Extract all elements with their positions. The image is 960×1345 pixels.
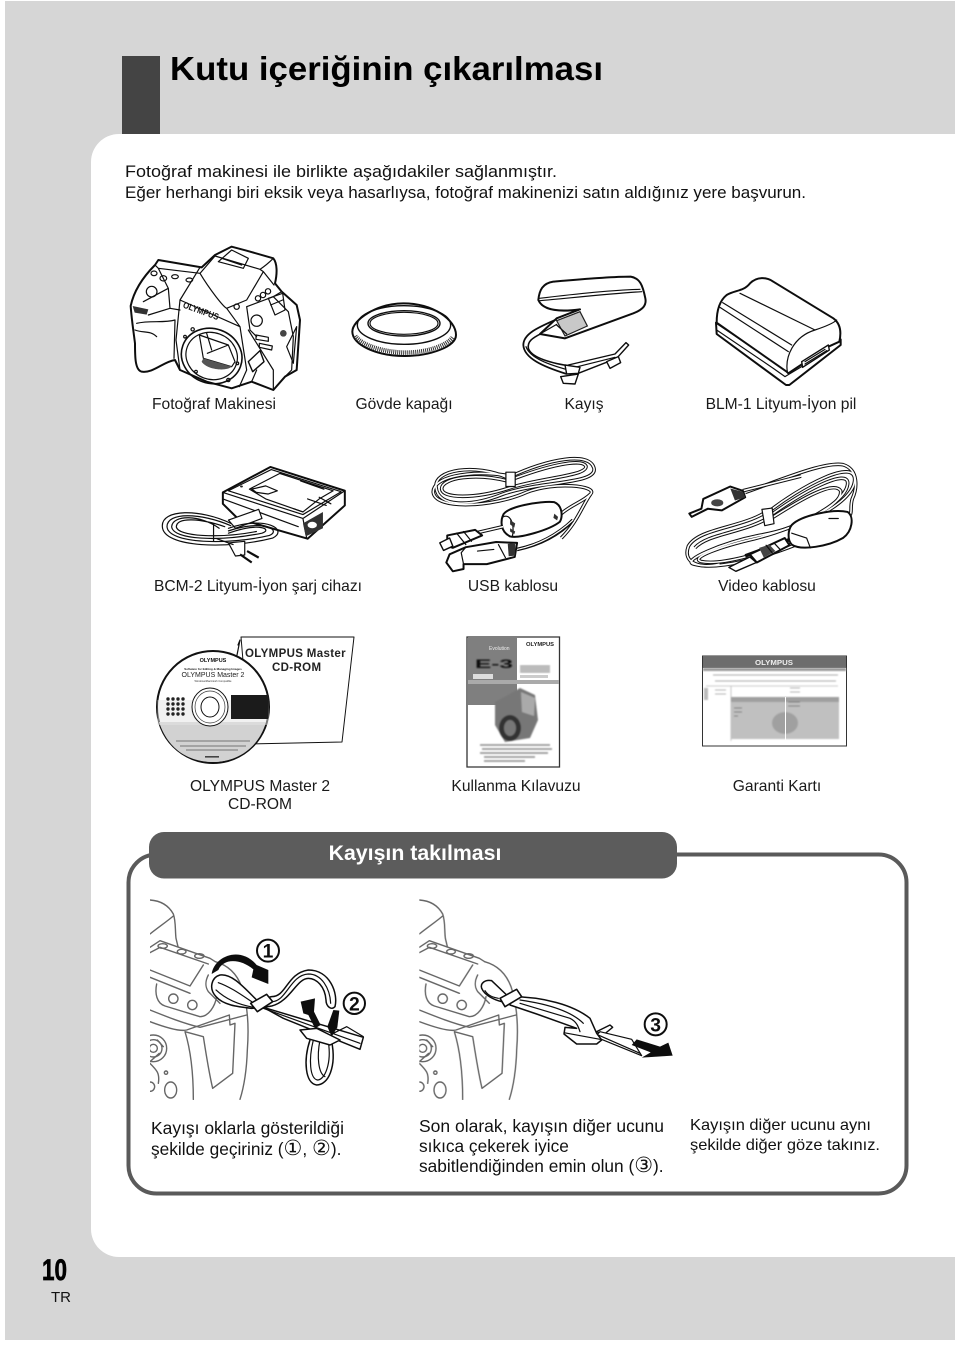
caption: OLYMPUS Master 2 CD-ROM: CD-ROM (228, 796, 292, 813)
arrow 3 (632, 1039, 673, 1058)
intro text (125, 163, 806, 202)
caption: Garanti Kartı: Garanti Kartı (733, 778, 821, 795)
circled number 2: 2 (349, 994, 360, 1015)
illustration: instruction manual: E-3 (475, 657, 514, 671)
caption: Kullanma Kılavuzu: Kullanma Kılavuzu (451, 778, 581, 795)
language code: TR (51, 1289, 71, 1306)
white content panel (91, 134, 960, 1257)
tail of strap (595, 1025, 642, 1056)
step 2 text (419, 1116, 664, 1177)
illustration: instruction manual: OLYMPUS (526, 642, 555, 648)
illustration: USB cable (433, 459, 594, 571)
caption: USB kablosu: USB kablosu (468, 578, 558, 595)
caption: OLYMPUS Master 2 CD-ROM (190, 778, 330, 813)
hanging strap loops (300, 1027, 363, 1085)
section heading: Kayışın takılması (149, 832, 677, 878)
illustration: video cable (687, 464, 856, 571)
step 1 text: şekilde geçiriniz (①, ②). (151, 1136, 341, 1160)
circled number 1: 1 (263, 942, 274, 963)
step 1 text: Kayışı oklarla gösterildiği (151, 1118, 344, 1138)
intro text: Eğer herhangi biri eksik veya hasarlıysa, fotoğraf makinenizi satın aldığınız yere başvurun. (125, 184, 806, 202)
circled number 3 (645, 1013, 667, 1036)
step 2 text: Son olarak, kayışın diğer ucunu (419, 1116, 664, 1136)
arrow 1 (212, 954, 268, 984)
disc: OLYMPUS Master 2 (182, 672, 245, 679)
tightened strap (481, 980, 602, 1044)
illustration: camera body: OLYMPUS (182, 300, 220, 322)
step 3 text (690, 1117, 880, 1154)
disc: OLYMPUS (200, 658, 227, 664)
intro text: Fotoğraf makinesi ile birlikte aşağıdakiler sağlanmıştır. (125, 163, 557, 181)
illustration: warranty card: OLYMPUS (755, 660, 793, 667)
step 2 text: sıkıca çekerek iyice (419, 1136, 569, 1156)
illustration: instruction manual (467, 637, 560, 767)
illustration: warranty card (702, 656, 846, 746)
sleeve (232, 637, 354, 744)
illustration: camera body (131, 247, 300, 392)
arrow 2 (301, 998, 339, 1037)
section frame: strap attachment (128, 854, 906, 1194)
sleeve: OLYMPUS Master (245, 648, 346, 660)
circled number 2 (344, 993, 365, 1015)
dark title marker (122, 56, 160, 134)
sleeve: CD-ROM (272, 662, 321, 674)
circled number 3: 3 (650, 1015, 661, 1036)
step 1 text (151, 1118, 344, 1160)
illustration: battery charger (162, 467, 345, 563)
page number: 10 (42, 1254, 67, 1287)
caption: Fotoğraf Makinesi: Fotoğraf Makinesi (152, 396, 276, 413)
strap end loop (212, 970, 363, 1049)
illustration: instruction manual: Evolution (489, 646, 510, 652)
title: Kutu içeriğinin çıkarılması (170, 51, 603, 88)
step 3 text: Kayışın diğer ucunu aynı (690, 1117, 871, 1134)
illustration: battery (716, 278, 841, 385)
illustration: step 2 tightening strap (409, 900, 673, 1099)
illustration: neck strap (523, 277, 646, 384)
disc: Software for Editing & Managing Images (184, 667, 242, 671)
circled number 1 (257, 940, 279, 963)
caption: Gövde kapağı: Gövde kapağı (355, 396, 453, 413)
caption: OLYMPUS Master 2 CD-ROM: OLYMPUS Master 2 (190, 778, 330, 795)
illustration: body cap (352, 303, 456, 356)
illustration: CD-ROM and sleeve (157, 637, 354, 763)
step 2 text: sabitlendiğinden emin olun (③). (419, 1153, 664, 1177)
caption: Video kablosu: Video kablosu (718, 578, 816, 595)
disc (157, 651, 269, 763)
illustration: step 1 threading strap (140, 900, 365, 1099)
section heading: Kayışın takılması: Kayışın takılması (329, 841, 501, 865)
caption: BLM-1 Lityum-İyon pil: BLM-1 Lityum-İyon pil (706, 394, 856, 413)
step 3 text: şekilde diğer göze takınız. (690, 1137, 880, 1154)
caption: BCM-2 Lityum-İyon şarj cihazı: BCM-2 Lityum-İyon şarj cihazı (154, 576, 362, 595)
disc: Windows/Macintosh Compatible (195, 679, 232, 683)
caption: Kayış: Kayış (564, 396, 604, 413)
